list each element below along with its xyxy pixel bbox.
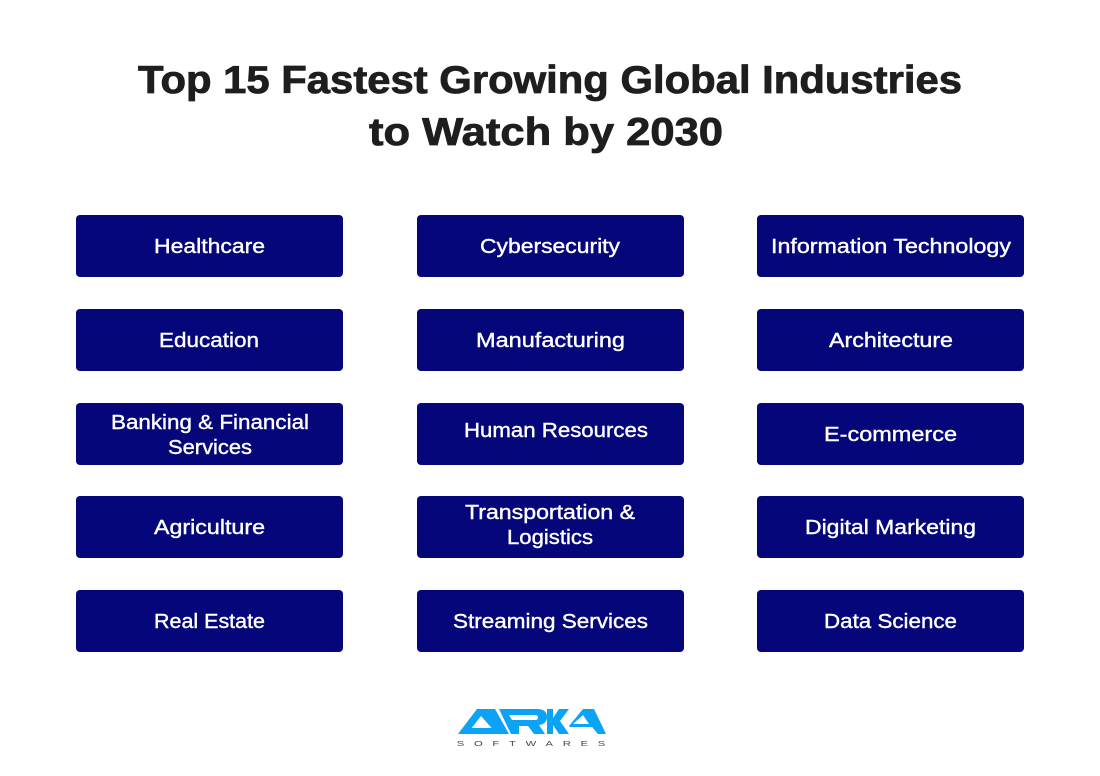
panel: Streaming Services: Streaming Services bbox=[453, 610, 648, 633]
panel: Healthcare: Healthcare bbox=[154, 235, 265, 258]
panel: Data Science: Data Science bbox=[824, 610, 957, 633]
text: SOFTWARES: SOFTWARES bbox=[457, 740, 605, 748]
panel: Streaming Services bbox=[417, 590, 684, 652]
panel: Human Resources bbox=[417, 403, 684, 465]
panel: Transportation & Logistics: Logistics bbox=[507, 526, 593, 549]
panel: Human Resources: Human Resources bbox=[464, 419, 648, 442]
panel: Real Estate bbox=[76, 590, 343, 652]
panel: Education: Education bbox=[159, 329, 259, 352]
panel: Information Technology: Information Technology bbox=[771, 235, 1012, 258]
panel: Real Estate: Real Estate bbox=[154, 610, 265, 633]
logo: Arka Softwares bbox=[457, 709, 606, 748]
panel: Cybersecurity: Cybersecurity bbox=[480, 235, 621, 258]
panel: Information Technology bbox=[757, 215, 1024, 277]
panel: Banking & Financial Services: Services bbox=[168, 436, 252, 459]
panel: Banking & Financial Services: Banking & Financial bbox=[111, 411, 309, 434]
panel: Transportation & Logistics bbox=[417, 496, 684, 558]
panel: Data Science bbox=[757, 590, 1024, 652]
panel: E-commerce: E-commerce bbox=[824, 423, 957, 446]
panel: Agriculture: Agriculture bbox=[154, 516, 265, 539]
panel: Agriculture bbox=[76, 496, 343, 558]
panel: Architecture: Architecture bbox=[829, 329, 953, 352]
panel: Healthcare bbox=[76, 215, 343, 277]
title: to Watch by 2030 bbox=[369, 111, 723, 154]
title: Top 15 Fastest Growing Global Industries bbox=[138, 59, 962, 102]
title bbox=[138, 59, 962, 154]
panel: Banking & Financial Services bbox=[76, 403, 343, 465]
panel: Manufacturing: Manufacturing bbox=[476, 329, 625, 352]
panel: Education bbox=[76, 309, 343, 371]
panel: E-commerce bbox=[757, 403, 1024, 465]
panel: Transportation & Logistics: Transportation & bbox=[465, 501, 635, 524]
panel: Manufacturing bbox=[417, 309, 684, 371]
icon: ARKA wordmark bbox=[458, 709, 606, 734]
panel: Digital Marketing bbox=[757, 496, 1024, 558]
panel: Digital Marketing: Digital Marketing bbox=[805, 516, 976, 539]
panel: Architecture bbox=[757, 309, 1024, 371]
panel: Cybersecurity bbox=[417, 215, 684, 277]
